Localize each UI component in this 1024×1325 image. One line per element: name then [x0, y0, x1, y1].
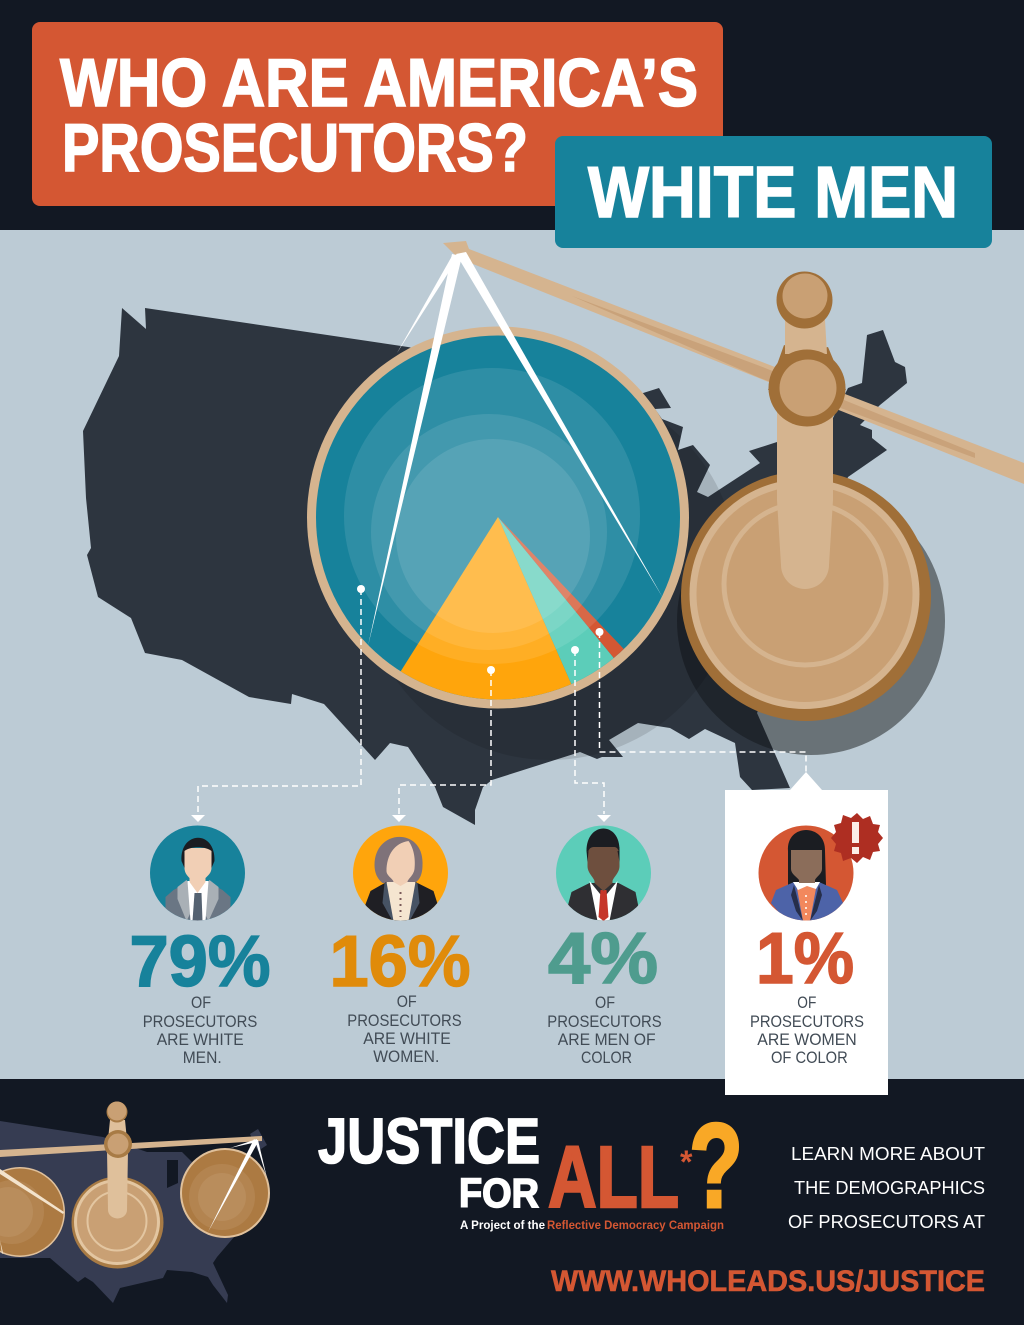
answer panel: white men [555, 136, 992, 248]
stat: 4 percent men of color: PROSECUTORS [547, 1012, 662, 1031]
highlight card: women of color [725, 772, 888, 1095]
stat: 1 percent women of color: PROSECUTORS [750, 1012, 864, 1031]
logo: Justice for all: ALL [548, 1129, 679, 1226]
logo: Justice for all [318, 1099, 743, 1233]
call to action text: OF PROSECUTORS AT [788, 1212, 985, 1232]
logo: Justice for all: ? [689, 1099, 743, 1233]
stat: 4 percent men of color: ARE MEN OF [558, 1030, 656, 1049]
footer left pan [0, 1167, 65, 1257]
call to action text: THE DEMOGRAPHICS [794, 1178, 985, 1198]
stat: 16 percent white women: PROSECUTORS [347, 1011, 462, 1030]
logo: Justice for all: JUSTICE [318, 1105, 540, 1177]
map of the United States [83, 308, 907, 825]
stat: 79 percent white men: MEN. [183, 1048, 222, 1067]
pie slice: women of color 1% [498, 518, 624, 658]
answer panel: white men: WHITE MEN [588, 153, 958, 233]
stat: 16 percent white women [330, 922, 470, 1066]
footer beam [0, 1136, 262, 1157]
avatar: man of color [556, 826, 651, 921]
shadow of the scale base on background [677, 487, 945, 755]
stat: 4 percent men of color: 4% [548, 919, 658, 999]
connector: white men [191, 585, 365, 822]
pan strings [368, 252, 663, 646]
footer band [0, 1079, 1024, 1325]
stat: 79 percent white men [130, 922, 270, 1067]
stat: 16 percent white women: OF [397, 992, 417, 1011]
footer lake [167, 1160, 178, 1188]
logo: Justice for all: Reflective Democracy Campaign [547, 1218, 724, 1232]
logo: Justice for all: * [680, 1144, 693, 1180]
footer map tip: Maine [250, 1129, 267, 1151]
footer right pan [180, 1139, 270, 1238]
call to action text: LEARN MORE ABOUT [791, 1144, 985, 1164]
pie slice: white women 16% [400, 517, 572, 700]
title panel: PROSECUTORS? [62, 110, 528, 186]
avatar: white man [150, 826, 245, 921]
logo: Justice for all: A Project of the [460, 1218, 545, 1232]
stat: 79 percent white men: OF [191, 993, 211, 1012]
icon: alert badge [831, 813, 883, 863]
avatar: white woman [353, 826, 448, 921]
avatar: woman of color [758, 826, 854, 921]
stat: 16 percent white women: 16% [330, 922, 470, 1002]
stat: 1 percent women of color [750, 919, 864, 1067]
connector: women of color [596, 628, 806, 775]
footer map [0, 1121, 240, 1303]
logo: Justice for all: FOR [459, 1170, 539, 1216]
stat: 4 percent men of color: OF [595, 993, 615, 1012]
connector: white women [392, 666, 495, 822]
title panel [32, 22, 723, 206]
footer scale illustration [0, 1102, 270, 1303]
connector: men of color [571, 646, 611, 822]
scale base and pillar [681, 272, 931, 721]
stat: 79 percent white men: ARE WHITE [157, 1030, 244, 1049]
stat: 4 percent men of color [547, 919, 662, 1067]
stat: 1 percent women of color: OF [797, 993, 816, 1012]
stat: 16 percent white women: WOMEN. [373, 1047, 439, 1066]
stat: 1 percent women of color: ARE WOMEN [757, 1030, 857, 1049]
shadow of the pan on background [556, 470, 719, 760]
pie slice: men of color 4% [498, 517, 614, 684]
website address: WWW.WHOLEADS.US/JUSTICE [551, 1265, 985, 1298]
stat: 1 percent women of color: OF COLOR [771, 1048, 848, 1067]
stat: 79 percent white men: 79% [130, 922, 270, 1002]
stat: 4 percent men of color: COLOR [581, 1048, 632, 1067]
footer scale base and pillar [72, 1102, 164, 1268]
stat: 1 percent women of color: 1% [756, 919, 854, 999]
scale beam [443, 241, 1024, 484]
title panel: WHO ARE AMERICA’S [60, 45, 698, 121]
call to action text [788, 1144, 985, 1232]
stat: 79 percent white men: PROSECUTORS [143, 1012, 257, 1031]
map shading from the pan and the base [677, 587, 773, 750]
scale pan pie chart [300, 320, 700, 720]
header band [0, 0, 1024, 230]
stat: 16 percent white women: ARE WHITE [363, 1029, 451, 1048]
